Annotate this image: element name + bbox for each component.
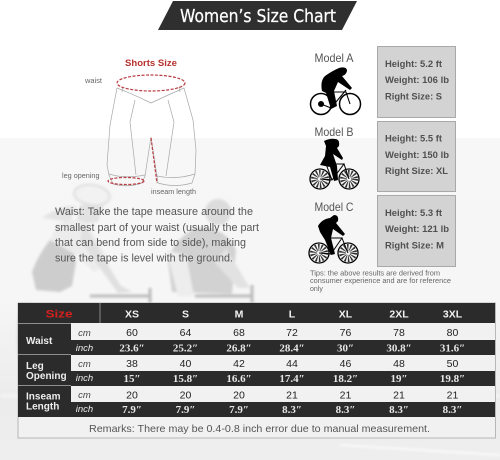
unit labels: cm: [78, 328, 91, 339]
panel: model C stats: [378, 196, 456, 266]
model B: [310, 125, 359, 189]
cm values: [126, 327, 458, 402]
cm values: 68: [233, 327, 245, 339]
panel: model C stats: Weight: 121 lb: [385, 224, 449, 235]
table header row: M: [235, 308, 244, 320]
model C: [309, 200, 358, 263]
panel: model A stats: [378, 46, 456, 118]
cm values: 20: [233, 390, 245, 402]
row stripes: [71, 324, 495, 417]
unit labels: inch: [76, 343, 93, 354]
cm values: 64: [180, 327, 191, 339]
inch values: 31.6″: [440, 342, 465, 354]
cm values: 20: [180, 390, 191, 402]
inch values: 8.3″: [336, 404, 355, 416]
panel: model B stats: Height: 5.5 ft: [385, 134, 443, 144]
label: leg opening: leg opening: [62, 173, 100, 180]
cm values: 76: [340, 327, 351, 339]
cm values: 48: [393, 358, 405, 370]
tips note: [310, 270, 451, 293]
waist instructions text: that can bend from side to side), making: [55, 237, 246, 249]
faded cyclists background photo: [0, 138, 500, 460]
cm values: 44: [286, 358, 298, 370]
waist instructions text: [55, 206, 259, 264]
shorts diagram: [62, 75, 196, 196]
remarks box: Remarks: There may be 0.4-0.8 inch error due to manual measurement.: [89, 423, 430, 435]
cm values: 21: [447, 390, 458, 402]
cm values: 21: [286, 390, 298, 402]
panel: model A stats: Height: 5.2 ft: [385, 59, 443, 70]
cm values: 60: [126, 327, 138, 339]
tips note: only: [310, 286, 323, 293]
inch values: 25.2″: [173, 342, 198, 354]
unit labels: cm: [78, 359, 91, 370]
inch values: 30″: [337, 342, 354, 354]
title banner: [158, 1, 357, 30]
inch values: 23.6″: [119, 342, 145, 354]
cm values: 78: [393, 327, 405, 339]
inch values: 7.9″: [122, 404, 142, 416]
table header row: XS: [125, 308, 139, 320]
row labels: [18, 324, 71, 417]
inch values: 17.4″: [279, 373, 305, 385]
unit labels: [76, 328, 93, 415]
inch values: 19″: [390, 373, 408, 385]
icon: cyclist B: [310, 139, 359, 189]
inch values: 18.2″: [333, 373, 358, 385]
row labels: Inseam: [26, 392, 61, 402]
cm values: 20: [126, 390, 138, 402]
model B label: Model B: [314, 125, 354, 139]
icon: cyclist A: [310, 67, 360, 114]
unit labels: cm: [78, 390, 91, 401]
inch values: 30.8″: [386, 342, 412, 354]
waist instructions text: sure the tape is level with the ground.: [55, 252, 233, 264]
inch values: [119, 342, 465, 416]
label: waist: waist: [84, 78, 102, 85]
cm values: 46: [340, 358, 351, 370]
waist instructions text: Waist: Take the tape measure around the: [55, 206, 253, 218]
inch values: 26.8″: [226, 342, 252, 354]
panel: model A stats: Weight: 106 lb: [385, 75, 449, 86]
inch values: 7.9″: [176, 404, 195, 416]
panel: model B stats: [378, 122, 456, 192]
table header row: [18, 303, 495, 323]
icon: cyclist C: [309, 215, 358, 263]
model C label: Model C: [314, 200, 354, 214]
cm values: 80: [447, 327, 458, 339]
cm values: 21: [393, 390, 405, 402]
size chart table: [18, 303, 496, 438]
remarks box: [18, 303, 496, 438]
model A label: Model A: [314, 51, 354, 65]
inch values: 16.6″: [226, 373, 252, 385]
panel: model A stats: Right Size: S: [385, 92, 442, 102]
unit labels: inch: [76, 373, 93, 384]
panel: model B stats: Right Size: XL: [385, 166, 448, 177]
cm values: 21: [340, 390, 351, 402]
waist instructions text: smallest part of your waist (usually the part: [55, 222, 259, 234]
cm values: 50: [447, 358, 458, 370]
panel: model B stats: Weight: 150 lb: [385, 150, 449, 161]
inch values: 15″: [123, 373, 141, 385]
tips note: consumer experience and are for reference: [310, 278, 451, 285]
cm values: 38: [126, 358, 138, 370]
table header row: L: [289, 308, 296, 320]
row labels: Waist: [26, 336, 53, 347]
table header row: Size: [46, 308, 72, 320]
inch values: 28.4″: [279, 342, 305, 354]
panel: model C stats: Right Size: M: [385, 240, 444, 252]
cm values: 72: [286, 327, 298, 339]
title banner: Women’s Size Chart: [180, 6, 336, 27]
cm values: 42: [233, 358, 245, 370]
heading: shorts size: Shorts Size: [125, 58, 177, 69]
row labels: Length: [26, 402, 59, 412]
table header row: S: [182, 308, 189, 320]
unit labels: inch: [76, 404, 93, 415]
inch values: 19.8″: [440, 373, 465, 385]
table header row: 2XL: [389, 308, 409, 320]
panel: model C stats: Height: 5.3 ft: [385, 208, 443, 219]
table header row: XL: [339, 308, 353, 320]
inch values: 15.8″: [173, 373, 198, 385]
inch values: 8.3″: [443, 404, 462, 416]
table header row: 3XL: [443, 308, 463, 320]
inch values: 8.3″: [389, 404, 409, 416]
label: inseam length: inseam length: [151, 189, 196, 196]
inch values: 7.9″: [229, 404, 249, 416]
tips note: Tips: the above results are derived from: [310, 270, 440, 278]
row labels: Leg: [26, 361, 44, 372]
row labels: Opening: [26, 371, 67, 382]
inch values: 8.3″: [282, 404, 302, 416]
cm values: 40: [180, 358, 191, 370]
model A: [310, 51, 360, 114]
